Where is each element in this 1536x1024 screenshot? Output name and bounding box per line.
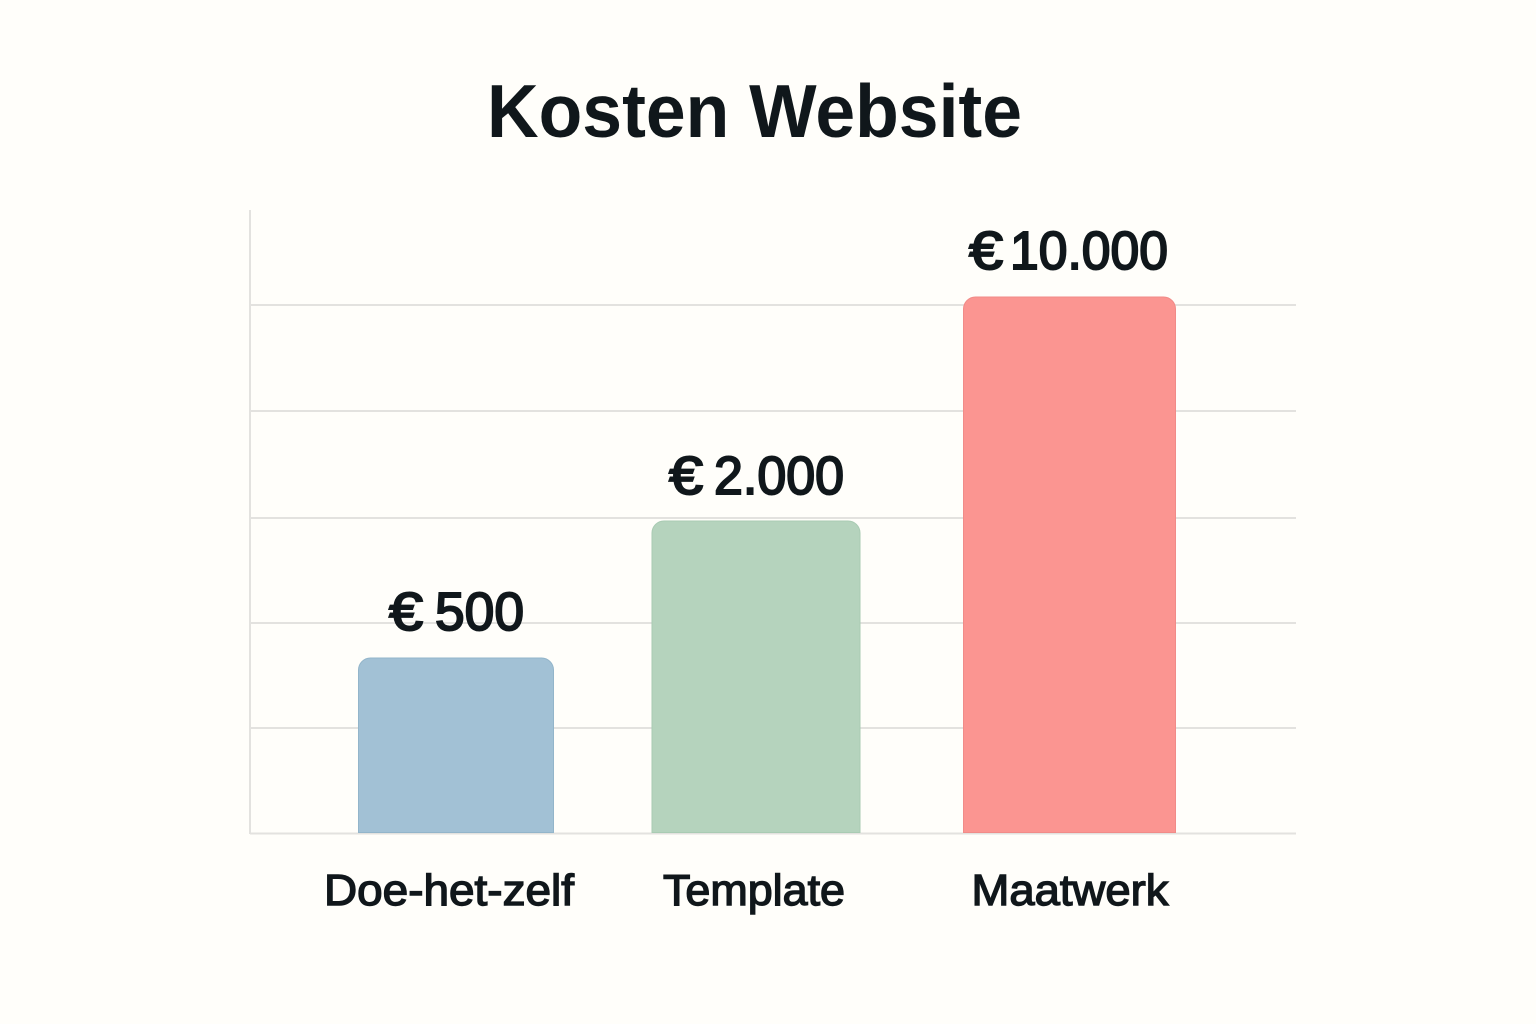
value: € 500: 500: [435, 582, 524, 642]
category label: Doe-het-zelf: Doe-het-zelf: [324, 866, 575, 915]
bar: Template: [652, 446, 860, 832]
value: € 500: [389, 582, 524, 642]
title: Kosten Website: [487, 69, 1022, 153]
bar: Maatwerk: [964, 221, 1176, 832]
category label: Maatwerk: Maatwerk: [972, 866, 1170, 915]
value: € 2.000: 2.000: [714, 446, 844, 506]
value: € 10.000: €: [969, 221, 1003, 281]
value: € 500: €: [389, 582, 423, 642]
category label: Template: Template: [663, 866, 845, 915]
bar: Doe-het-zelf: [358, 582, 554, 832]
value: € 10.000: 10.000: [1010, 221, 1168, 281]
value: € 2.000: €: [669, 446, 703, 506]
